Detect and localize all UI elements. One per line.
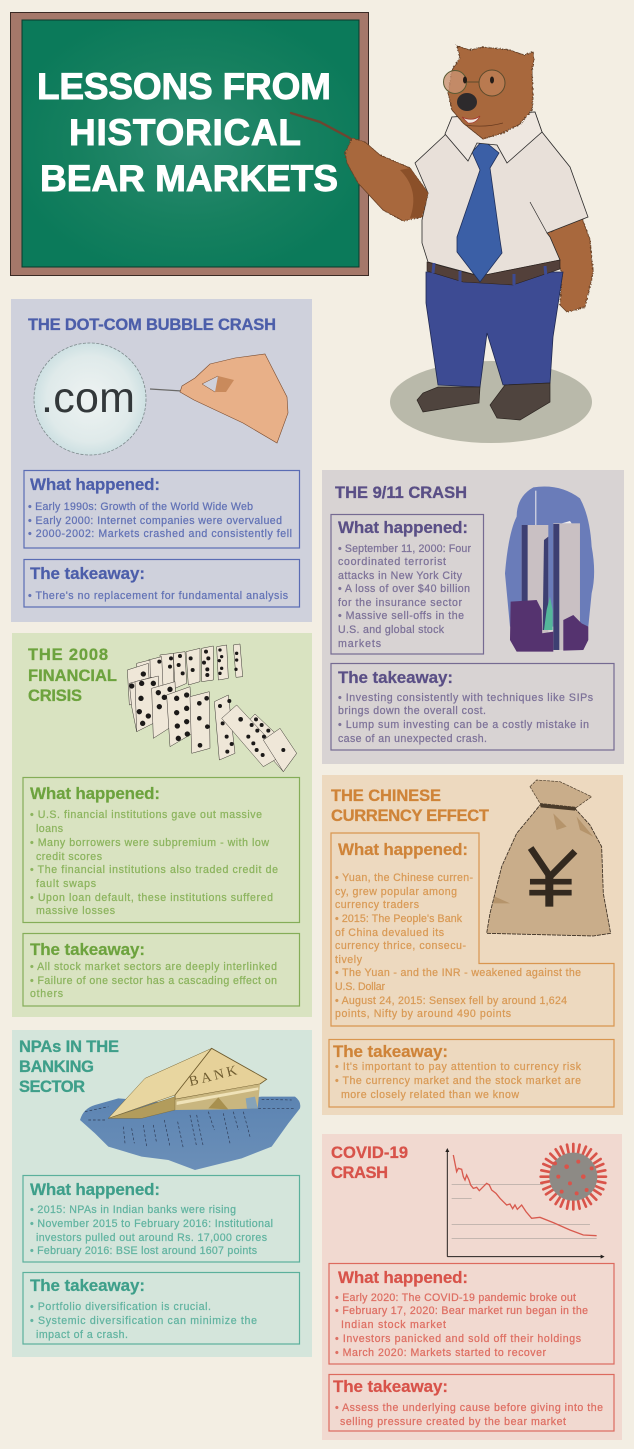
takeaway box: • Investing consistently with techniques like SIPs — [338, 692, 593, 704]
what happened box: loans — [36, 823, 63, 835]
what happened box: • September 11, 2000: Four — [338, 543, 471, 555]
takeaway box: • All stock market sectors are deeply interlinked — [30, 961, 277, 973]
right arm — [547, 218, 593, 312]
takeaway box: The takeaway: — [30, 564, 145, 583]
illustration: teacher bear — [291, 46, 593, 443]
takeaway box — [23, 934, 300, 1006]
what happened box: • Early 1990s: Growth of the World Wide Web — [28, 501, 253, 513]
what happened box: • August 24, 2015: Sensex fell by around 1,624 — [335, 995, 567, 1007]
illustration: twin towers — [505, 486, 594, 652]
what happened box: • November 2015 to February 2016: Institutional — [30, 1218, 273, 1230]
takeaway box: • Portfolio diversification is crucial. — [30, 1301, 211, 1313]
what happened box: • March 2020: Markets started to recover — [335, 1347, 546, 1359]
takeaway box: • Failure of one sector has a cascading effect on — [30, 975, 277, 987]
takeaway box — [329, 1374, 614, 1431]
what happened box: • February 2016: BSE lost around 1607 points — [30, 1245, 257, 1257]
what happened box: • 2015: NPAs in Indian banks were rising — [30, 1204, 236, 1216]
what happened box: massive losses — [36, 905, 115, 917]
takeaway box: case of an unexpected crash. — [338, 733, 487, 745]
shadow under bear — [390, 361, 592, 443]
what happened box: currency traders — [335, 899, 419, 911]
left arm — [345, 138, 428, 221]
what happened box: for the insurance sector — [338, 597, 462, 609]
takeaway box: brings down the overall cost. — [338, 705, 486, 717]
heading — [331, 787, 489, 825]
takeaway box — [331, 664, 614, 750]
head — [448, 46, 534, 139]
what happened box: U.S. Dollar — [335, 981, 385, 993]
heading — [28, 646, 117, 705]
heading: THE 2008 — [28, 646, 108, 664]
what happened box: investors pulled out around Rs. 17,000 crores — [36, 1232, 267, 1244]
what happened box — [331, 514, 484, 654]
takeaway box: selling pressure created by the bear market — [340, 1416, 566, 1428]
heading: CRASH — [331, 1164, 388, 1182]
takeaway box: • The currency market and the stock market are — [335, 1075, 581, 1087]
title text: HISTORICAL — [69, 112, 301, 153]
collar — [445, 112, 542, 163]
what happened box: currency thrice, consecu- — [335, 940, 466, 952]
takeaway box — [24, 560, 300, 607]
heading — [19, 1038, 119, 1096]
heading: THE CHINESE — [331, 787, 441, 805]
icon: .com bubble: .com — [41, 374, 135, 422]
takeaway box: The takeaway: — [338, 668, 453, 687]
panel: dot-com bubble crash — [11, 299, 312, 622]
pointer stick — [291, 113, 376, 156]
chalkboard title — [10, 12, 368, 276]
title text: LESSONS FROM — [37, 66, 331, 107]
icon: virus — [541, 1144, 606, 1209]
what happened box: • 2015: The People's Bank — [335, 913, 463, 925]
heading: FINANCIAL — [28, 667, 117, 685]
nose and mouth — [457, 93, 477, 111]
heading: SECTOR — [19, 1078, 85, 1096]
takeaway box: The takeaway: — [30, 1276, 145, 1295]
what happened box: fault swaps — [36, 878, 96, 890]
trousers — [426, 272, 563, 387]
takeaway box: • Assess the underlying cause before giving into the — [335, 1402, 603, 1414]
what happened box — [24, 470, 300, 548]
what happened box: • A loss of over $40 billion — [338, 583, 470, 595]
what happened box: credit scores — [36, 851, 102, 863]
what happened box: • U.S. financial institutions gave out massive — [30, 809, 262, 821]
what happened box — [331, 833, 614, 1026]
what happened box: of China devalued its — [335, 927, 444, 939]
icon: .com bubble — [34, 343, 146, 455]
what happened box: • 2000-2002: Markets crashed and consistently fell — [28, 528, 292, 540]
tie — [457, 140, 502, 282]
what happened box: • Massive sell-offs in the — [338, 610, 464, 622]
panel: Chinese currency effect — [322, 775, 623, 1115]
panel: 9/11 crash — [322, 470, 624, 764]
icon: hand with pin — [150, 354, 288, 443]
shirt — [415, 112, 588, 276]
what happened box: • Early 2000: Internet companies were overvalued — [28, 515, 282, 527]
chart: market fall line — [445, 1144, 606, 1259]
what happened box — [23, 1176, 300, 1262]
panel: NPAs in the banking sector — [12, 1030, 312, 1357]
panel: COVID-19 crash — [322, 1134, 622, 1440]
what happened box: • The Yuan - and the INR - weakened against the — [335, 967, 581, 979]
what happened box — [329, 1264, 614, 1364]
belt — [427, 260, 560, 285]
what happened box: What happened: — [30, 475, 160, 494]
what happened box: • Early 2020: The COVID-19 pandemic broke out — [335, 1292, 576, 1304]
heading: NPAs IN THE — [19, 1038, 119, 1056]
illustration: falling dominoes — [127, 644, 297, 772]
what happened box: Indian stock market — [341, 1319, 446, 1331]
what happened box: • Many borrowers were subpremium - with low — [30, 837, 269, 849]
what happened box: What happened: — [338, 840, 468, 859]
what happened box: • Yuan, the Chinese curren- — [335, 872, 473, 884]
what happened box: What happened: — [30, 784, 160, 803]
what happened box: U.S. and global stock — [338, 624, 445, 636]
takeaway box: The takeaway: — [333, 1377, 448, 1396]
takeaway box: impact of a crash. — [36, 1329, 128, 1341]
what happened box: attacks in New York City — [338, 570, 463, 582]
what happened box: What happened: — [338, 1268, 468, 1287]
takeaway box: others — [30, 988, 63, 1000]
heading — [331, 1144, 408, 1182]
illustration: yuan money bag — [487, 780, 611, 936]
what happened box: What happened: — [338, 518, 468, 537]
heading: BANKING — [19, 1058, 94, 1076]
takeaway box: The takeaway: — [333, 1042, 448, 1061]
what happened box: • Upon loan default, these institutions suffered — [30, 892, 273, 904]
shoes — [417, 383, 550, 420]
takeaway box: more closely related than we know — [341, 1089, 519, 1101]
panel: 2008 financial crisis — [12, 633, 312, 1017]
what happened box: coordinated terrorist — [338, 556, 446, 568]
heading: THE 9/11 CRASH — [335, 484, 467, 502]
takeaway box: • Lump sum investing can be a costly mistake in — [338, 719, 589, 731]
belt loops — [433, 263, 546, 285]
title text — [37, 66, 338, 199]
heading: THE DOT-COM BUBBLE CRASH — [28, 316, 276, 334]
illustration: sinking bank: BANK — [188, 1064, 239, 1090]
what happened box: tively — [335, 954, 363, 966]
what happened box: • February 17, 2020: Bear market run began in the — [335, 1305, 588, 1317]
heading: COVID-19 — [331, 1144, 408, 1162]
illustration: sinking bank — [80, 1048, 300, 1170]
what happened box: What happened: — [30, 1180, 160, 1199]
heading: CURRENCY EFFECT — [331, 807, 489, 825]
heading: CRISIS — [28, 687, 82, 705]
takeaway box: The takeaway: — [30, 940, 145, 959]
what happened box: markets — [338, 638, 381, 650]
what happened box: points, Nifty by around 490 points — [335, 1008, 511, 1020]
takeaway box — [329, 1040, 614, 1107]
what happened box — [23, 778, 300, 922]
takeaway box: • It's important to pay attention to currency risk — [335, 1061, 582, 1073]
takeaway box: • There's no replacement for fundamental analysis — [28, 590, 288, 602]
what happened box: cy, grew popular among — [335, 886, 457, 898]
takeaway box: • Systemic diversification can minimize the — [30, 1315, 257, 1327]
takeaway box — [23, 1272, 300, 1344]
what happened box: • Investors panicked and sold off their holdings — [335, 1333, 581, 1345]
title text: BEAR MARKETS — [40, 158, 338, 199]
glasses — [444, 70, 466, 94]
what happened box: • The financial institutions also traded credit de — [30, 864, 278, 876]
